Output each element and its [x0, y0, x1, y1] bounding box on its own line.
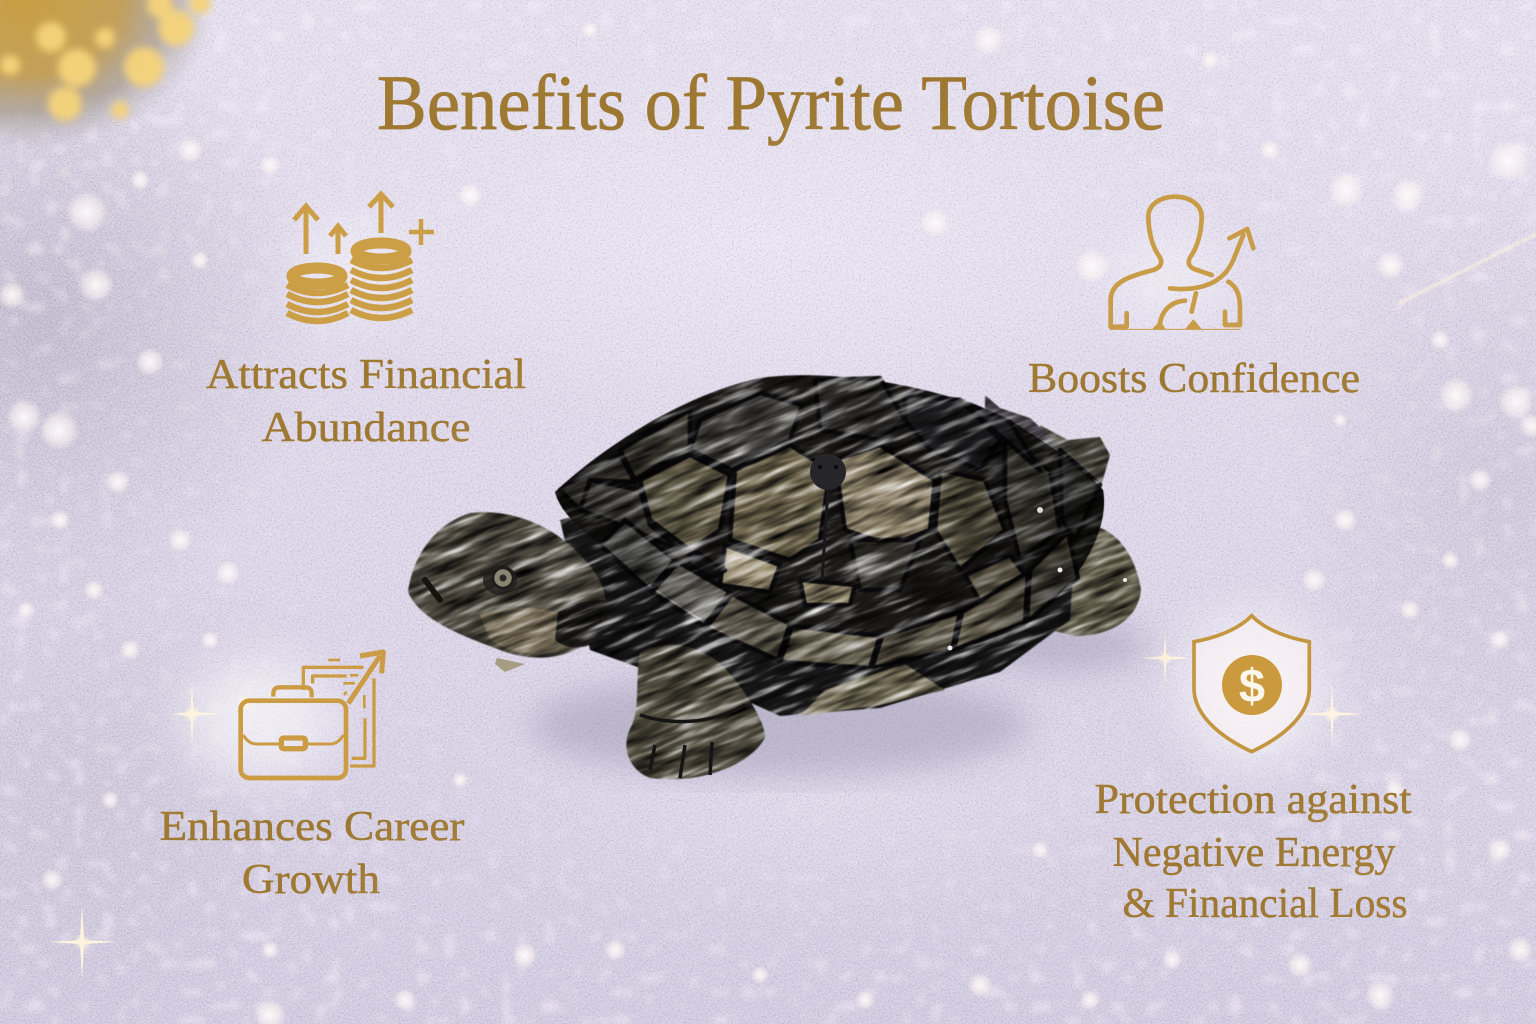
decorative sparkles and soft icon glows: [48, 220, 1364, 980]
tortoise dome shading: [555, 375, 1104, 667]
benefit: boosts confidence: [1028, 197, 1360, 402]
head: [408, 512, 606, 658]
front leg: [626, 645, 765, 779]
label: attracts financial abundance: [206, 352, 526, 451]
tortoise eye: [483, 565, 517, 595]
label: protection against negative energy and financial loss: Negative Energy: [1112, 830, 1396, 876]
tortoise base shapes: [268, 121, 1281, 1024]
benefit: enhances career growth: [160, 652, 465, 903]
tortoise shell details: [425, 454, 1127, 778]
label: attracts financial abundance: Abundance: [262, 405, 470, 451]
icon: briefcase with growth chart: [241, 652, 383, 778]
turtle ground shadow: [530, 619, 1150, 777]
label: enhances career growth: [160, 804, 465, 903]
label: enhances career growth: Enhances Career: [160, 804, 465, 850]
label: attracts financial abundance: Attracts Financial: [206, 352, 526, 398]
shell scutes: [560, 378, 1100, 668]
decorative light streak, right edge: [1398, 234, 1536, 304]
decorative gold bokeh, top-left: [0, 0, 215, 150]
label: boosts confidence: Boosts Confidence: [1028, 356, 1360, 402]
icon: shield with dollar coin: $: [1239, 659, 1265, 712]
label: enhances career growth: Growth: [242, 857, 380, 903]
icon: shield with dollar coin: [1194, 616, 1309, 752]
label: protection against negative energy and financial loss: & Financial Loss: [1122, 881, 1408, 927]
benefit: attracts financial abundance: [206, 194, 526, 451]
benefit: protection against negative energy and financial loss: [1094, 616, 1412, 927]
label: protection against negative energy and financial loss: Protection against: [1094, 777, 1412, 823]
pyrite tortoise figure: [268, 121, 1281, 1024]
title: Benefits of Pyrite Tortoise: [377, 59, 1165, 146]
icon: coin stacks with arrows: [287, 194, 434, 321]
icon: person with rising arrow: [1110, 197, 1253, 329]
label: protection against negative energy and financial loss: [1094, 777, 1412, 927]
